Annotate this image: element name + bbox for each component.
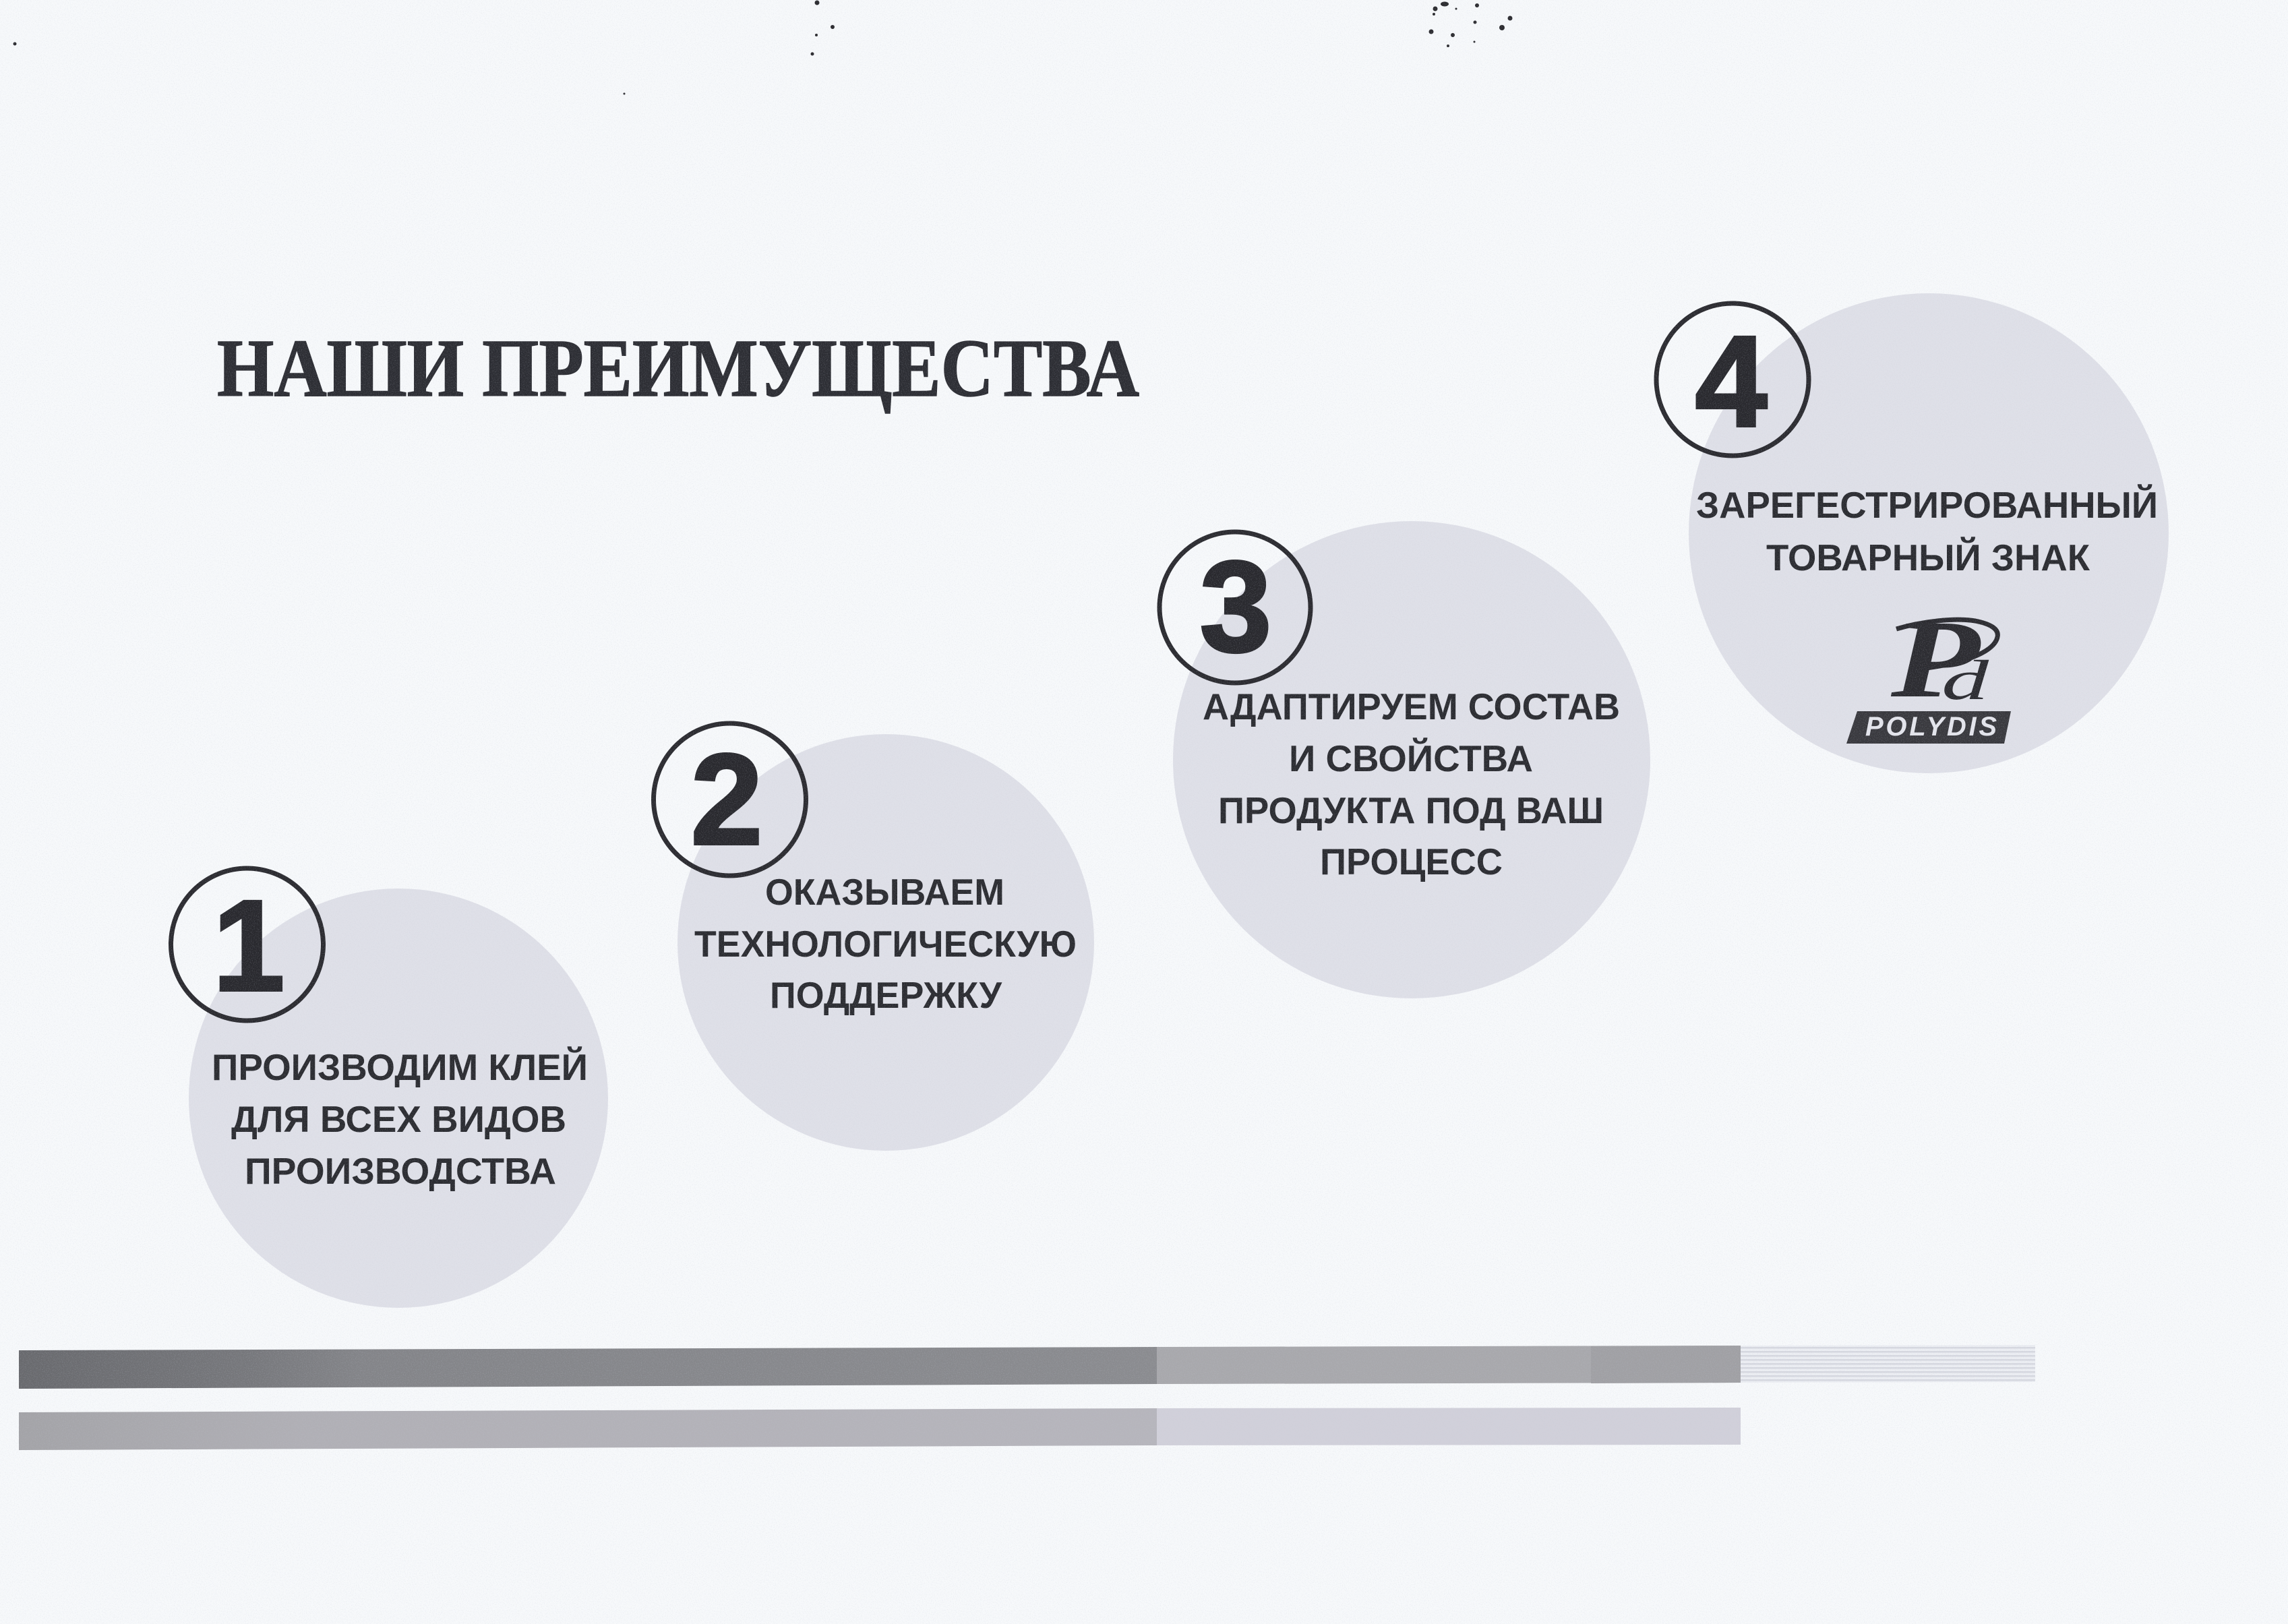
panel: advantage 2: [654, 723, 1094, 1151]
logo: Polydis: [1846, 597, 2011, 744]
logo: Polydis: POLYDIS: [1865, 712, 1997, 742]
logo: Polydis: d: [1941, 649, 1990, 712]
text: support: ТЕХНОЛОГИЧЕСКУЮ: [694, 923, 1077, 965]
text: trademark: [1696, 483, 2158, 578]
footer bar: lower: [19, 1408, 1741, 1450]
text: production: [212, 1046, 588, 1192]
number badge 1: [171, 868, 324, 1021]
circle background 3: [1173, 521, 1650, 998]
text: production: ПРОИЗВОДСТВА: [245, 1150, 556, 1192]
number badge 2: [654, 723, 806, 876]
number badge 1: 1: [213, 873, 284, 1018]
number badge 2: 2: [691, 727, 762, 872]
text: support: ПОДДЕРЖКУ: [770, 974, 1002, 1016]
title: НАШИ ПРЕИМУЩЕСТВА: [217, 323, 1139, 414]
circle background 2: [678, 734, 1094, 1151]
text: production: ПРОИЗВОДИМ КЛЕЙ: [212, 1046, 588, 1088]
text: adaptation: ПРОДУКТА ПОД ВАШ: [1218, 789, 1604, 831]
text: production: ДЛЯ ВСЕХ ВИДОВ: [231, 1098, 566, 1140]
number badge 4: 4: [1695, 309, 1767, 454]
circle background 1: [189, 889, 608, 1308]
panel: advantage 1: [171, 868, 608, 1308]
logo: Polydis: P: [1890, 597, 1981, 721]
number badge 3: [1160, 532, 1311, 683]
panel: advantage 3: [1160, 521, 1650, 998]
text: support: [694, 871, 1077, 1016]
text: adaptation: ПРОЦЕСС: [1320, 841, 1503, 882]
text: adaptation: И СВОЙСТВА: [1289, 737, 1533, 779]
circle background 4: [1689, 293, 2169, 773]
text: trademark: ЗАРЕГЕСТРИРОВАННЫЙ: [1696, 483, 2158, 526]
footer bar: upper: [19, 1345, 2035, 1389]
text: support: ОКАЗЫВАЕМ: [765, 871, 1004, 913]
panel: advantage 4: [1656, 293, 2169, 773]
number badge 4: [1656, 303, 1809, 456]
text: adaptation: АДАПТИРУЕМ СОСТАВ: [1203, 686, 1620, 727]
scan specks: [13, 0, 1513, 94]
number badge 3: 3: [1200, 534, 1271, 679]
text: trademark: ТОВАРНЫЙ ЗНАК: [1766, 536, 2090, 578]
text: adaptation: [1203, 686, 1620, 882]
